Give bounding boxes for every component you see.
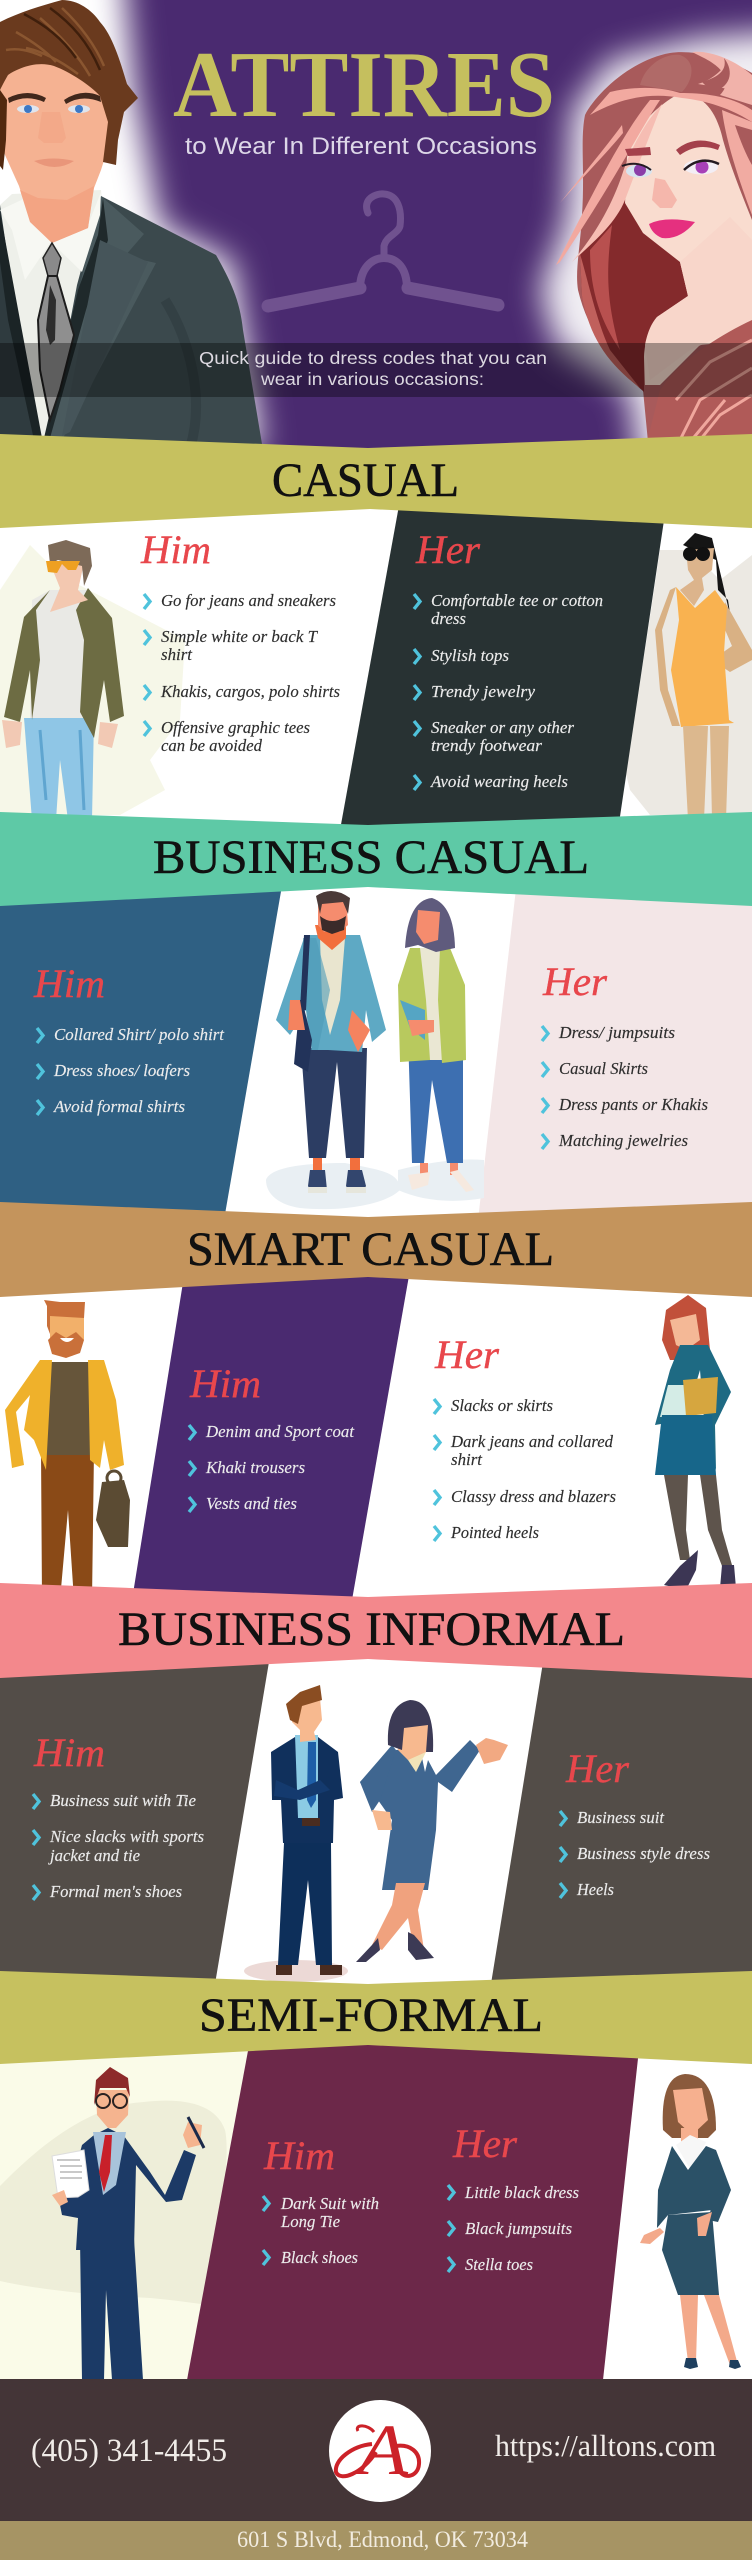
- heading: her: Her: [565, 1746, 629, 1791]
- smart casual her list: Pointed heels: [450, 1523, 539, 1542]
- heading: him: Him: [33, 1730, 105, 1775]
- heading: her: Her: [542, 959, 607, 1004]
- smart casual him list: [189, 1361, 355, 1513]
- band: business casual: [0, 812, 752, 906]
- heading: him: Him: [189, 1361, 261, 1406]
- casual her list: Trendy jewelry: [431, 682, 535, 701]
- band: casual: CASUAL: [272, 454, 459, 507]
- business casual him list: [33, 961, 225, 1116]
- casual her list: trendy footwear: [431, 736, 542, 755]
- smart casual her list: Dark jeans and collared: [450, 1432, 613, 1451]
- address strip: [0, 2521, 752, 2560]
- illustration: smart casual woman: [655, 1295, 736, 1590]
- casual him list: Khakis, cargos, polo shirts: [160, 682, 340, 701]
- business informal her list: Heels: [576, 1880, 614, 1899]
- heading: her: Her: [415, 527, 480, 572]
- band: smart casual: SMART CASUAL: [187, 1223, 554, 1276]
- footer: [0, 2379, 752, 2521]
- band: business casual: BUSINESS CASUAL: [153, 831, 589, 884]
- semi-formal her list: Black jumpsuits: [465, 2219, 572, 2238]
- icon: clothes hanger: [268, 194, 498, 306]
- heading: her: Her: [452, 2121, 517, 2166]
- website: https://alltons.com: [495, 2428, 716, 2463]
- title: ATTIRES: [173, 33, 555, 137]
- semi-formal him list: Black shoes: [281, 2248, 358, 2267]
- heading: him: Him: [263, 2133, 335, 2178]
- smart casual her list: Classy dress and blazers: [451, 1487, 616, 1506]
- semi-formal her list: [448, 2121, 579, 2274]
- heading: him: Him: [140, 527, 211, 572]
- band: smart casual: [0, 1202, 752, 1297]
- illustration: casual woman: [655, 533, 752, 820]
- business informal her list: Business style dress: [577, 1844, 710, 1863]
- panel: business informal: [0, 1650, 752, 1990]
- smart casual him list: Khaki trousers: [205, 1458, 305, 1477]
- intro strip: wear in various occasions:: [260, 369, 484, 389]
- casual him list: Offensive graphic tees: [161, 718, 310, 737]
- business casual him list: Collared Shirt/ polo shirt: [54, 1025, 225, 1044]
- business informal him list: Nice slacks with sports: [49, 1827, 204, 1846]
- smart casual him list: Vests and ties: [206, 1494, 297, 1513]
- logo: A: [353, 2410, 409, 2490]
- casual her list: Avoid wearing heels: [430, 772, 568, 791]
- business casual her list: Dress pants or Khakis: [558, 1095, 708, 1114]
- casual her list: Sneaker or any other: [431, 718, 574, 737]
- band: business informal: BUSINESS INFORMAL: [118, 1603, 625, 1656]
- casual her list: Comfortable tee or cotton: [431, 591, 603, 610]
- casual her list: [414, 527, 603, 791]
- business casual her list: [542, 959, 708, 1150]
- logo: [329, 2400, 431, 2502]
- address strip: 601 S Blvd, Edmond, OK 73034: [237, 2527, 528, 2552]
- panel: casual: [0, 500, 752, 830]
- header panel: [0, 0, 752, 470]
- business informal him list: jacket and tie: [48, 1846, 140, 1865]
- casual him list: can be avoided: [161, 736, 262, 755]
- intro strip: [0, 343, 752, 397]
- casual her list: dress: [431, 609, 466, 628]
- business casual him list: Avoid formal shirts: [53, 1097, 185, 1116]
- panel: smart casual: [0, 1270, 752, 1600]
- smart casual him list: Denim and Sport coat: [205, 1422, 355, 1441]
- casual her list: Stylish tops: [431, 646, 509, 665]
- business casual him list: Dress shoes/ loafers: [53, 1061, 190, 1080]
- panel: semi-formal: [0, 2040, 752, 2380]
- smart casual her list: [434, 1332, 616, 1542]
- band: business informal: [0, 1583, 752, 1678]
- illustration: smart casual man: [5, 1300, 130, 1600]
- illustration: business informal couple: [244, 1685, 508, 1982]
- semi-formal her list: Stella toes: [465, 2255, 533, 2274]
- illustration: woman with red hair: [556, 52, 752, 442]
- panel: business casual: [0, 880, 752, 1220]
- phone number: (405) 341-4455: [31, 2433, 227, 2469]
- heading: him: Him: [33, 961, 105, 1006]
- business informal him list: [33, 1730, 204, 1901]
- subtitle: to Wear In Different Occasions: [185, 133, 537, 160]
- business casual her list: Casual Skirts: [559, 1059, 648, 1078]
- semi-formal him list: [263, 2133, 379, 2267]
- casual him list: shirt: [161, 645, 193, 664]
- business casual her list: Dress/ jumpsuits: [558, 1023, 675, 1042]
- semi-formal him list: Dark Suit with: [280, 2194, 379, 2213]
- illustration: casual man: [2, 540, 124, 820]
- business casual her list: Matching jewelries: [558, 1131, 688, 1150]
- business informal her list: Business suit: [577, 1808, 665, 1827]
- band: semi-formal: SEMI-FORMAL: [199, 1989, 543, 2042]
- business informal him list: Formal men's shoes: [49, 1882, 182, 1901]
- band: semi-formal: [0, 1971, 752, 2064]
- casual him list: Go for jeans and sneakers: [161, 591, 336, 610]
- illustration: man in suit: [0, 0, 263, 450]
- heading: her: Her: [434, 1332, 499, 1377]
- illustration: semi-formal man: [52, 2067, 204, 2380]
- business informal him list: Business suit with Tie: [50, 1791, 196, 1810]
- illustration: semi-formal woman: [640, 2074, 741, 2369]
- band: casual: [0, 434, 752, 528]
- semi-formal her list: Little black dress: [464, 2183, 579, 2202]
- casual him list: [140, 527, 340, 755]
- semi-formal him list: Long Tie: [280, 2212, 340, 2231]
- smart casual her list: Slacks or skirts: [451, 1396, 553, 1415]
- intro strip: Quick guide to dress codes that you can: [199, 348, 547, 368]
- smart casual her list: shirt: [451, 1450, 483, 1469]
- casual him list: Simple white or back T: [161, 627, 319, 646]
- business informal her list: [560, 1746, 710, 1899]
- illustration: business casual couple: [266, 891, 484, 1209]
